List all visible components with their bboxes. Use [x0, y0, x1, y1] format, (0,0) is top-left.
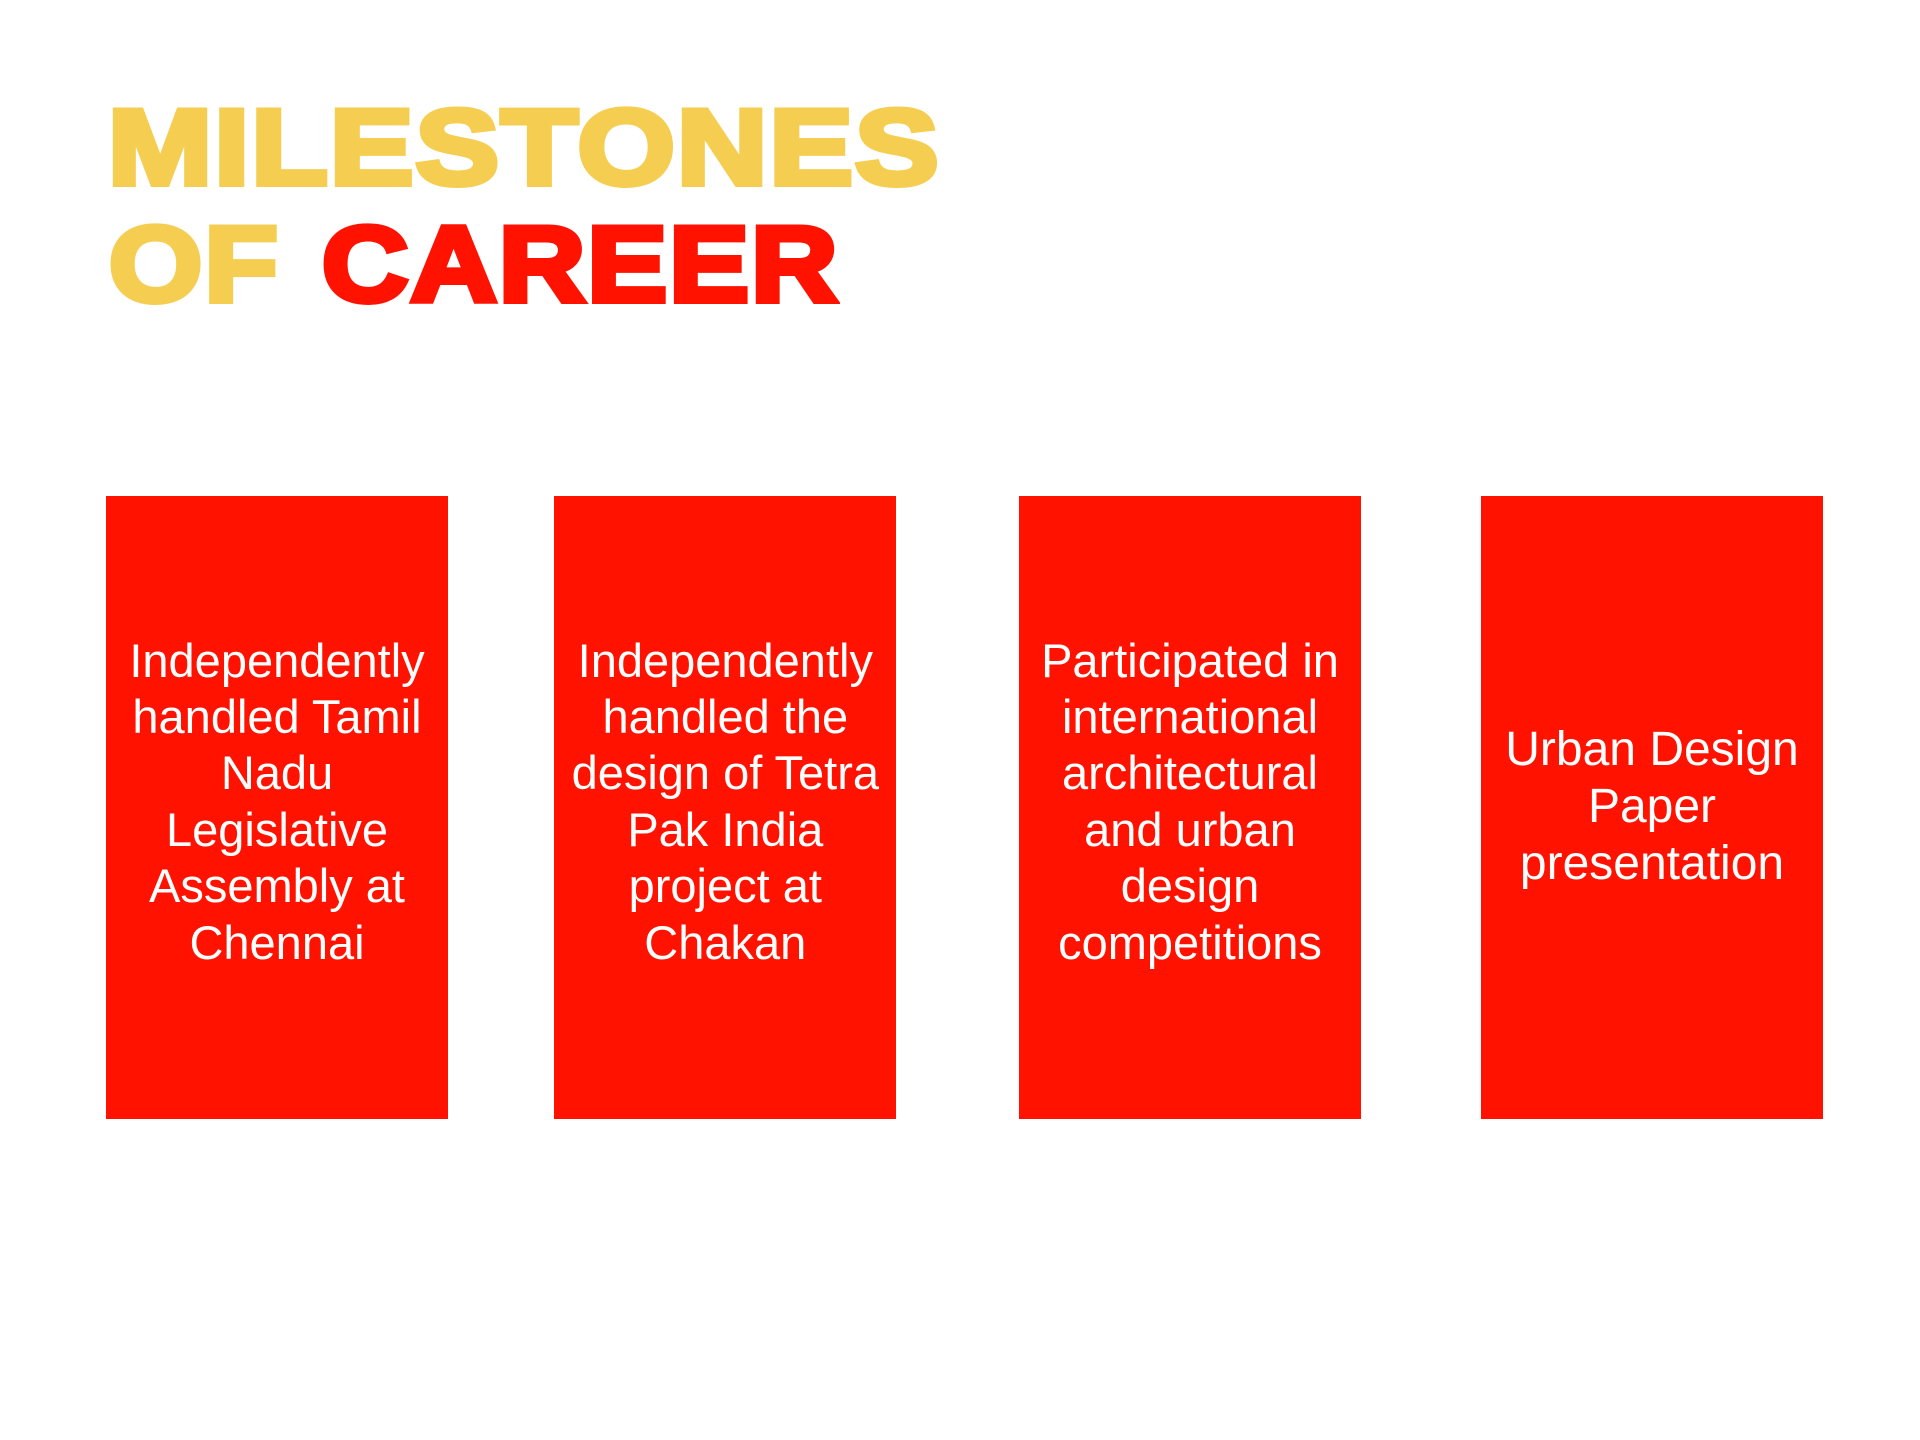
card: Tetra Pak India: design of Tetra [572, 746, 879, 799]
title line: MILESTONES: MILESTONES [108, 87, 941, 207]
card: Tamil Nadu Legislative Assembly [106, 496, 448, 1119]
card: Tamil Nadu Legislative Assembly: Assembly at [149, 859, 405, 912]
card: Tetra Pak India [554, 496, 896, 1119]
card: competitions: and urban [1084, 803, 1296, 856]
card: Tetra Pak India: Independently [578, 634, 873, 687]
card: Urban Design Paper presentation: presentation [1520, 837, 1784, 890]
card: Tamil Nadu Legislative Assembly: Legislative [166, 803, 388, 856]
card: Tamil Nadu Legislative Assembly: Independently [129, 634, 425, 687]
card: Urban Design Paper presentation: Paper [1588, 780, 1716, 833]
card: Tamil Nadu Legislative Assembly: Nadu [221, 746, 333, 799]
card: Tetra Pak India: Pak India [627, 803, 823, 856]
card: competitions: competitions [1058, 916, 1322, 969]
card: competitions: architectural [1062, 746, 1318, 799]
card: competitions: Participated in [1041, 634, 1339, 687]
card: competitions: design [1121, 859, 1259, 912]
card: competitions: international [1062, 690, 1318, 743]
title word: CAREER: CAREER [322, 204, 840, 324]
card: Urban Design Paper presentation: Urban Design [1505, 722, 1799, 776]
card: Tetra Pak India: project at [629, 859, 822, 912]
card: Tamil Nadu Legislative Assembly: Chennai [189, 916, 365, 969]
card: Tetra Pak India: Chakan [644, 916, 806, 969]
card: Tamil Nadu Legislative Assembly: handled Tamil [132, 690, 422, 743]
card: Tetra Pak India: handled the [602, 690, 848, 743]
title word: OF: OF [109, 204, 280, 324]
card: competitions [1019, 496, 1361, 1119]
card: Urban Design Paper presentation [1481, 496, 1823, 1119]
